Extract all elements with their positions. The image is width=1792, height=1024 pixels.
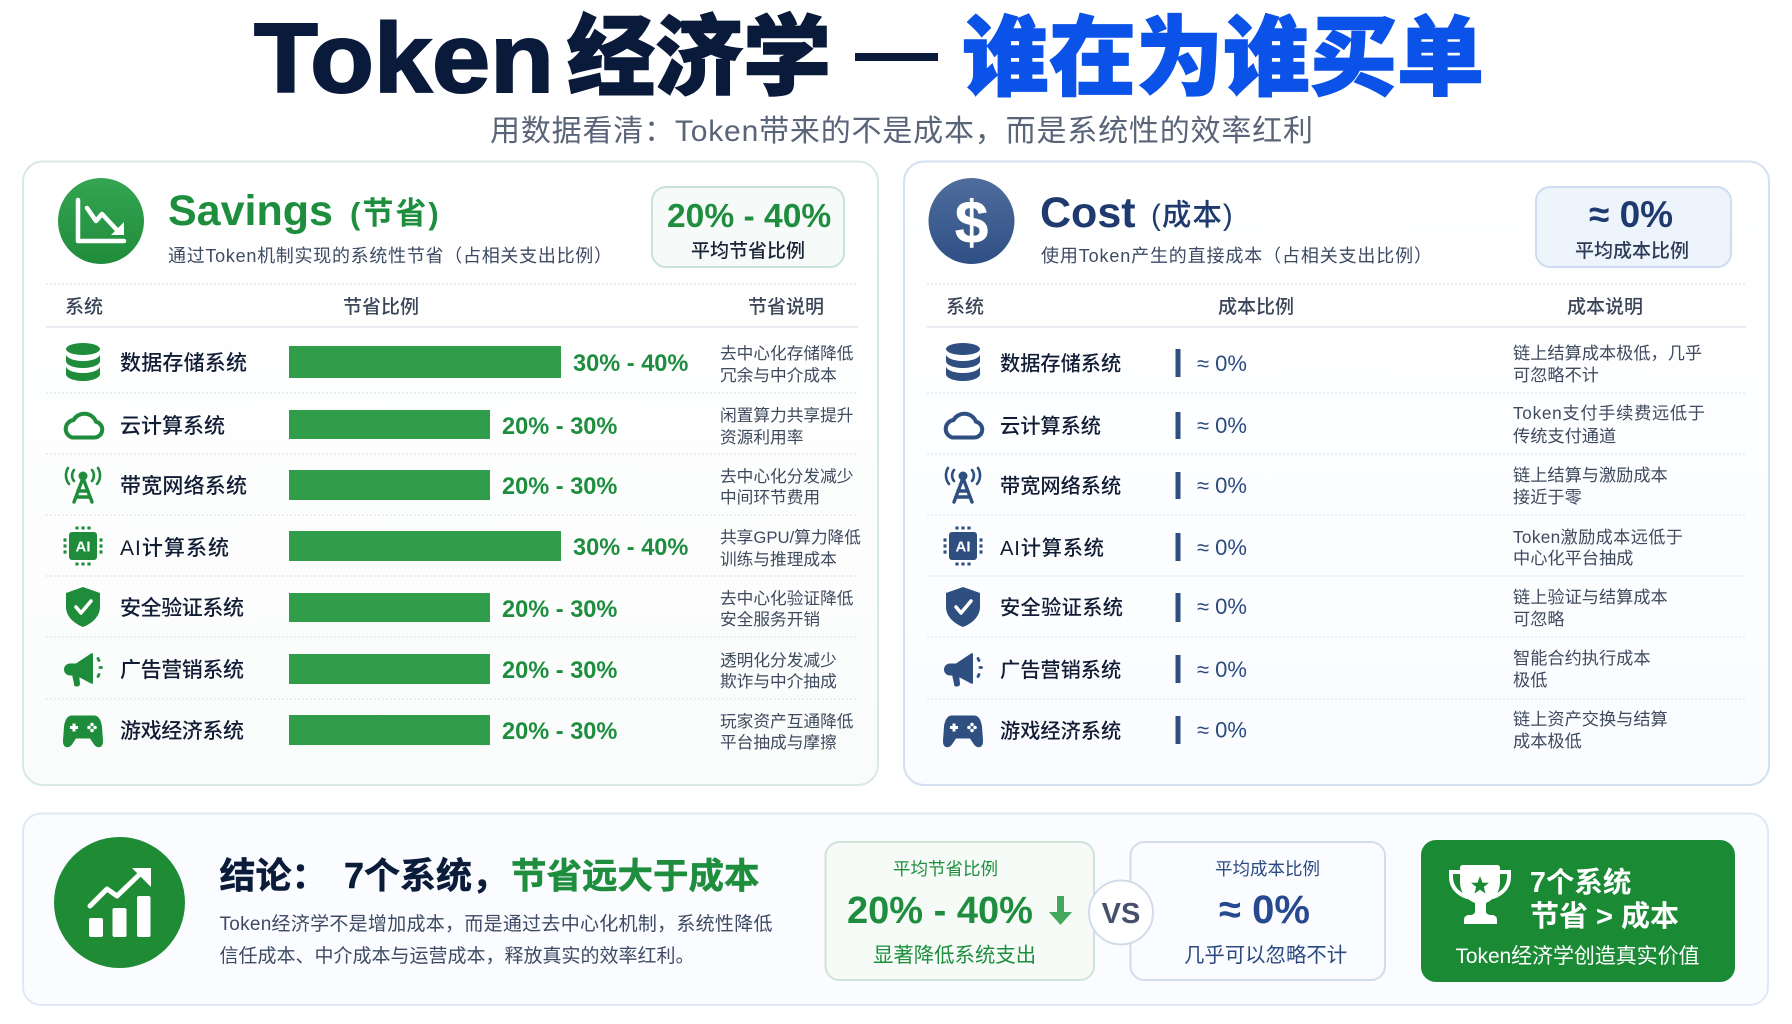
icon: megaphone bbox=[944, 653, 982, 686]
cost comparison card: ≈ 0% bbox=[1219, 888, 1310, 932]
icon: database bbox=[946, 343, 980, 381]
cost heading: Cost bbox=[1040, 189, 1136, 237]
row: 带宽网络系统 savings: 中间环节费用 bbox=[720, 488, 820, 507]
cost badge: 平均成本比例 bbox=[1575, 240, 1689, 262]
icon: gamepad bbox=[63, 716, 103, 747]
row: 数据存储系统 savings bbox=[66, 343, 854, 385]
icon: AI chip bbox=[64, 526, 102, 566]
row: 带宽网络系统 cost: 带宽网络系统 bbox=[1000, 474, 1121, 498]
savings badge bbox=[652, 187, 844, 267]
icon: shield bbox=[66, 587, 100, 627]
savings heading: Savings bbox=[168, 187, 333, 235]
row: 游戏经济系统 cost: 成本极低 bbox=[1513, 731, 1582, 751]
panel: cost bbox=[904, 162, 1769, 785]
row: 带宽网络系统 cost: 链上结算与激励成本 bbox=[1513, 465, 1668, 485]
cost description: 使用Token产生的直接成本（占相关支出比例） bbox=[1041, 246, 1432, 266]
row: 数据存储系统 savings: 去中心化存储降低 bbox=[720, 344, 854, 363]
savings comparison card: 20% - 40% bbox=[847, 890, 1033, 932]
cost heading: (成本) bbox=[1151, 199, 1234, 232]
row: 数据存储系统 cost: 数据存储系统 bbox=[1000, 352, 1121, 376]
savings description: 通过Token机制实现的系统性节省（占相关支出比例） bbox=[168, 246, 612, 266]
row: 云计算系统 savings: 闲置算力共享提升 bbox=[720, 406, 854, 425]
row: AI计算系统 cost: ≈ 0% bbox=[1197, 535, 1247, 560]
savings badge: 20% - 40% bbox=[667, 198, 831, 235]
row: 广告营销系统 savings: 透明化分发减少 bbox=[720, 651, 837, 670]
row: 云计算系统 savings: 20% - 30% bbox=[502, 414, 617, 440]
conclusion heading: 7个系统， bbox=[344, 855, 508, 896]
row: 游戏经济系统 cost: 游戏经济系统 bbox=[1000, 720, 1121, 743]
cost table header: 成本说明 bbox=[1567, 296, 1643, 318]
row: 云计算系统 cost: Token支付手续费远低于 bbox=[1513, 403, 1705, 423]
row: 广告营销系统 savings: 20% - 30% bbox=[502, 658, 617, 684]
row: AI计算系统 savings: 训练与推理成本 bbox=[720, 550, 837, 569]
title bbox=[254, 3, 1484, 113]
row: 带宽网络系统 cost bbox=[946, 465, 1668, 507]
row: 数据存储系统 savings: 30% - 40% bbox=[573, 351, 688, 377]
row: 带宽网络系统 savings bbox=[66, 467, 854, 507]
row: AI计算系统 savings: AI计算系统 bbox=[120, 537, 229, 560]
cost comparison card: 几乎可以忽略不计 bbox=[1184, 944, 1347, 967]
icon: tower bbox=[66, 468, 100, 502]
icon: growth chart bbox=[54, 837, 185, 968]
result callout bbox=[1421, 840, 1735, 982]
savings heading bbox=[168, 187, 441, 235]
icon: cloud bbox=[66, 414, 102, 438]
row: 游戏经济系统 savings: 平台抽成与摩擦 bbox=[720, 733, 837, 752]
row: 安全验证系统 savings: 20% - 30% bbox=[502, 597, 617, 623]
title: 经济学 bbox=[567, 8, 831, 107]
row: 游戏经济系统 cost: 链上资产交换与结算 bbox=[1513, 709, 1668, 729]
savings badge: 平均节省比例 bbox=[691, 240, 805, 262]
row: 安全验证系统 cost: ≈ 0% bbox=[1197, 594, 1247, 619]
icon: AI chip: AI bbox=[76, 538, 90, 556]
icon: database bbox=[66, 343, 100, 381]
icon: megaphone bbox=[64, 653, 102, 686]
row: 带宽网络系统 savings: 去中心化分发减少 bbox=[720, 467, 854, 486]
row: 广告营销系统 savings bbox=[64, 651, 837, 691]
row: 广告营销系统 savings: 广告营销系统 bbox=[120, 659, 244, 682]
cost table header: 成本比例 bbox=[1218, 296, 1294, 318]
icon: dollar: $ bbox=[955, 189, 988, 256]
conclusion heading: 节省远大于成本 bbox=[511, 856, 760, 896]
row: AI计算系统 cost bbox=[944, 526, 1683, 568]
row: 安全验证系统 cost: 链上验证与结算成本 bbox=[1513, 587, 1668, 607]
savings heading: (节省) bbox=[350, 196, 441, 231]
row: 云计算系统 savings bbox=[66, 406, 854, 447]
icon: gamepad bbox=[943, 716, 983, 747]
icon: down arrow bbox=[1049, 896, 1072, 925]
conclusion text bbox=[220, 913, 772, 967]
cost badge: ≈ 0% bbox=[1589, 194, 1673, 235]
savings table header bbox=[65, 296, 824, 318]
row: 云计算系统 savings: 云计算系统 bbox=[120, 415, 225, 438]
row: 安全验证系统 savings: 安全服务开销 bbox=[720, 610, 820, 629]
cost comparison card bbox=[1130, 842, 1385, 980]
row: 数据存储系统 savings: 冗余与中介成本 bbox=[720, 366, 837, 385]
panel: savings bbox=[23, 162, 878, 785]
row: 带宽网络系统 savings: 20% - 30% bbox=[502, 474, 617, 500]
cost table header: 系统 bbox=[946, 296, 984, 318]
icon: savings chart down bbox=[58, 178, 144, 264]
row: AI计算系统 cost: AI计算系统 bbox=[1000, 537, 1104, 560]
row: 游戏经济系统 savings: 游戏经济系统 bbox=[120, 720, 244, 743]
row: 云计算系统 cost: ≈ 0% bbox=[1197, 413, 1247, 438]
row: 安全验证系统 cost bbox=[946, 587, 1668, 629]
row: 安全验证系统 savings: 去中心化验证降低 bbox=[720, 589, 854, 608]
row: 数据存储系统 cost: 链上结算成本极低，几乎 bbox=[1513, 343, 1702, 363]
icon: cloud bbox=[946, 414, 982, 438]
icon: tower bbox=[946, 468, 980, 502]
row: 带宽网络系统 cost: 接近于零 bbox=[1513, 487, 1582, 507]
row: 安全验证系统 savings: 安全验证系统 bbox=[120, 597, 244, 620]
VS badge: VS bbox=[1102, 898, 1140, 930]
icon: AI chip bbox=[944, 526, 982, 566]
conclusion text: Token经济学不是增加成本，而是通过去中心化机制，系统性降低 bbox=[220, 913, 772, 935]
icon: AI chip: AI bbox=[956, 538, 970, 556]
row: AI计算系统 cost: Token激励成本远低于 bbox=[1513, 527, 1683, 547]
savings table header: 节省比例 bbox=[343, 296, 419, 318]
row: 广告营销系统 cost bbox=[944, 648, 1651, 690]
row: 数据存储系统 savings: 数据存储系统 bbox=[120, 352, 247, 375]
VS badge bbox=[1089, 880, 1153, 944]
cost heading bbox=[1040, 189, 1234, 237]
savings comparison card: 显著降低系统支出 bbox=[873, 944, 1036, 967]
icon: shield bbox=[946, 587, 980, 627]
icon: dollar bbox=[928, 178, 1014, 264]
row: AI计算系统 savings: 30% - 40% bbox=[573, 535, 688, 561]
row: 游戏经济系统 cost bbox=[943, 709, 1668, 751]
icon: trophy bbox=[1451, 865, 1509, 924]
cost comparison card: 平均成本比例 bbox=[1215, 859, 1320, 879]
row: 广告营销系统 savings: 欺诈与中介抽成 bbox=[720, 672, 837, 691]
result callout: Token经济学创造真实价值 bbox=[1456, 945, 1700, 968]
row: 广告营销系统 cost: 智能合约执行成本 bbox=[1513, 648, 1651, 668]
title: Token bbox=[254, 3, 554, 113]
row: 云计算系统 cost: 云计算系统 bbox=[1000, 415, 1101, 438]
subtitle: 用数据看清：Token带来的不是成本，而是系统性的效率红利 bbox=[490, 115, 1313, 148]
savings comparison card: 平均节省比例 bbox=[893, 859, 998, 879]
row: AI计算系统 savings: 共享GPU/算力降低 bbox=[720, 528, 861, 547]
row: 游戏经济系统 savings: 玩家资产互通降低 bbox=[720, 712, 854, 731]
conclusion text: 信任成本、中介成本与运营成本，释放真实的效率红利。 bbox=[220, 945, 695, 967]
conclusion heading: 结论： bbox=[220, 855, 328, 896]
row: 安全验证系统 cost: 可忽略 bbox=[1513, 609, 1565, 629]
title: 谁在为谁买单 bbox=[962, 10, 1484, 107]
row: 云计算系统 cost: 传统支付通道 bbox=[1513, 426, 1616, 446]
row: 游戏经济系统 savings: 20% - 30% bbox=[502, 719, 617, 745]
cost badge bbox=[1536, 187, 1731, 267]
conclusion heading bbox=[220, 855, 760, 896]
result callout: 节省 > 成本 bbox=[1530, 900, 1679, 933]
row: 数据存储系统 cost: 可忽略不计 bbox=[1513, 365, 1599, 385]
result callout: 7个系统 bbox=[1530, 867, 1631, 899]
savings table header: 节省说明 bbox=[748, 296, 824, 318]
row: AI计算系统 savings bbox=[64, 526, 861, 569]
row: 带宽网络系统 cost: ≈ 0% bbox=[1197, 473, 1247, 498]
row: 广告营销系统 cost: ≈ 0% bbox=[1197, 657, 1247, 682]
row: 安全验证系统 cost: 安全验证系统 bbox=[1000, 596, 1123, 620]
row: AI计算系统 cost: 中心化平台抽成 bbox=[1513, 548, 1633, 568]
savings table header: 系统 bbox=[65, 296, 103, 318]
row: 带宽网络系统 savings: 带宽网络系统 bbox=[120, 474, 247, 498]
row: 广告营销系统 cost: 极低 bbox=[1513, 670, 1547, 690]
row: 数据存储系统 cost bbox=[946, 343, 1702, 385]
row: 游戏经济系统 savings bbox=[63, 712, 854, 752]
row: 云计算系统 cost bbox=[946, 403, 1705, 446]
row: 安全验证系统 savings bbox=[66, 587, 854, 629]
panel: conclusion bbox=[23, 814, 1768, 1005]
row: 数据存储系统 cost: ≈ 0% bbox=[1197, 351, 1247, 376]
savings comparison card bbox=[826, 842, 1094, 980]
row: 云计算系统 savings: 资源利用率 bbox=[720, 428, 803, 447]
row: 游戏经济系统 cost: ≈ 0% bbox=[1197, 718, 1247, 742]
row: 广告营销系统 cost: 广告营销系统 bbox=[1000, 659, 1121, 682]
cost table header bbox=[946, 296, 1643, 318]
